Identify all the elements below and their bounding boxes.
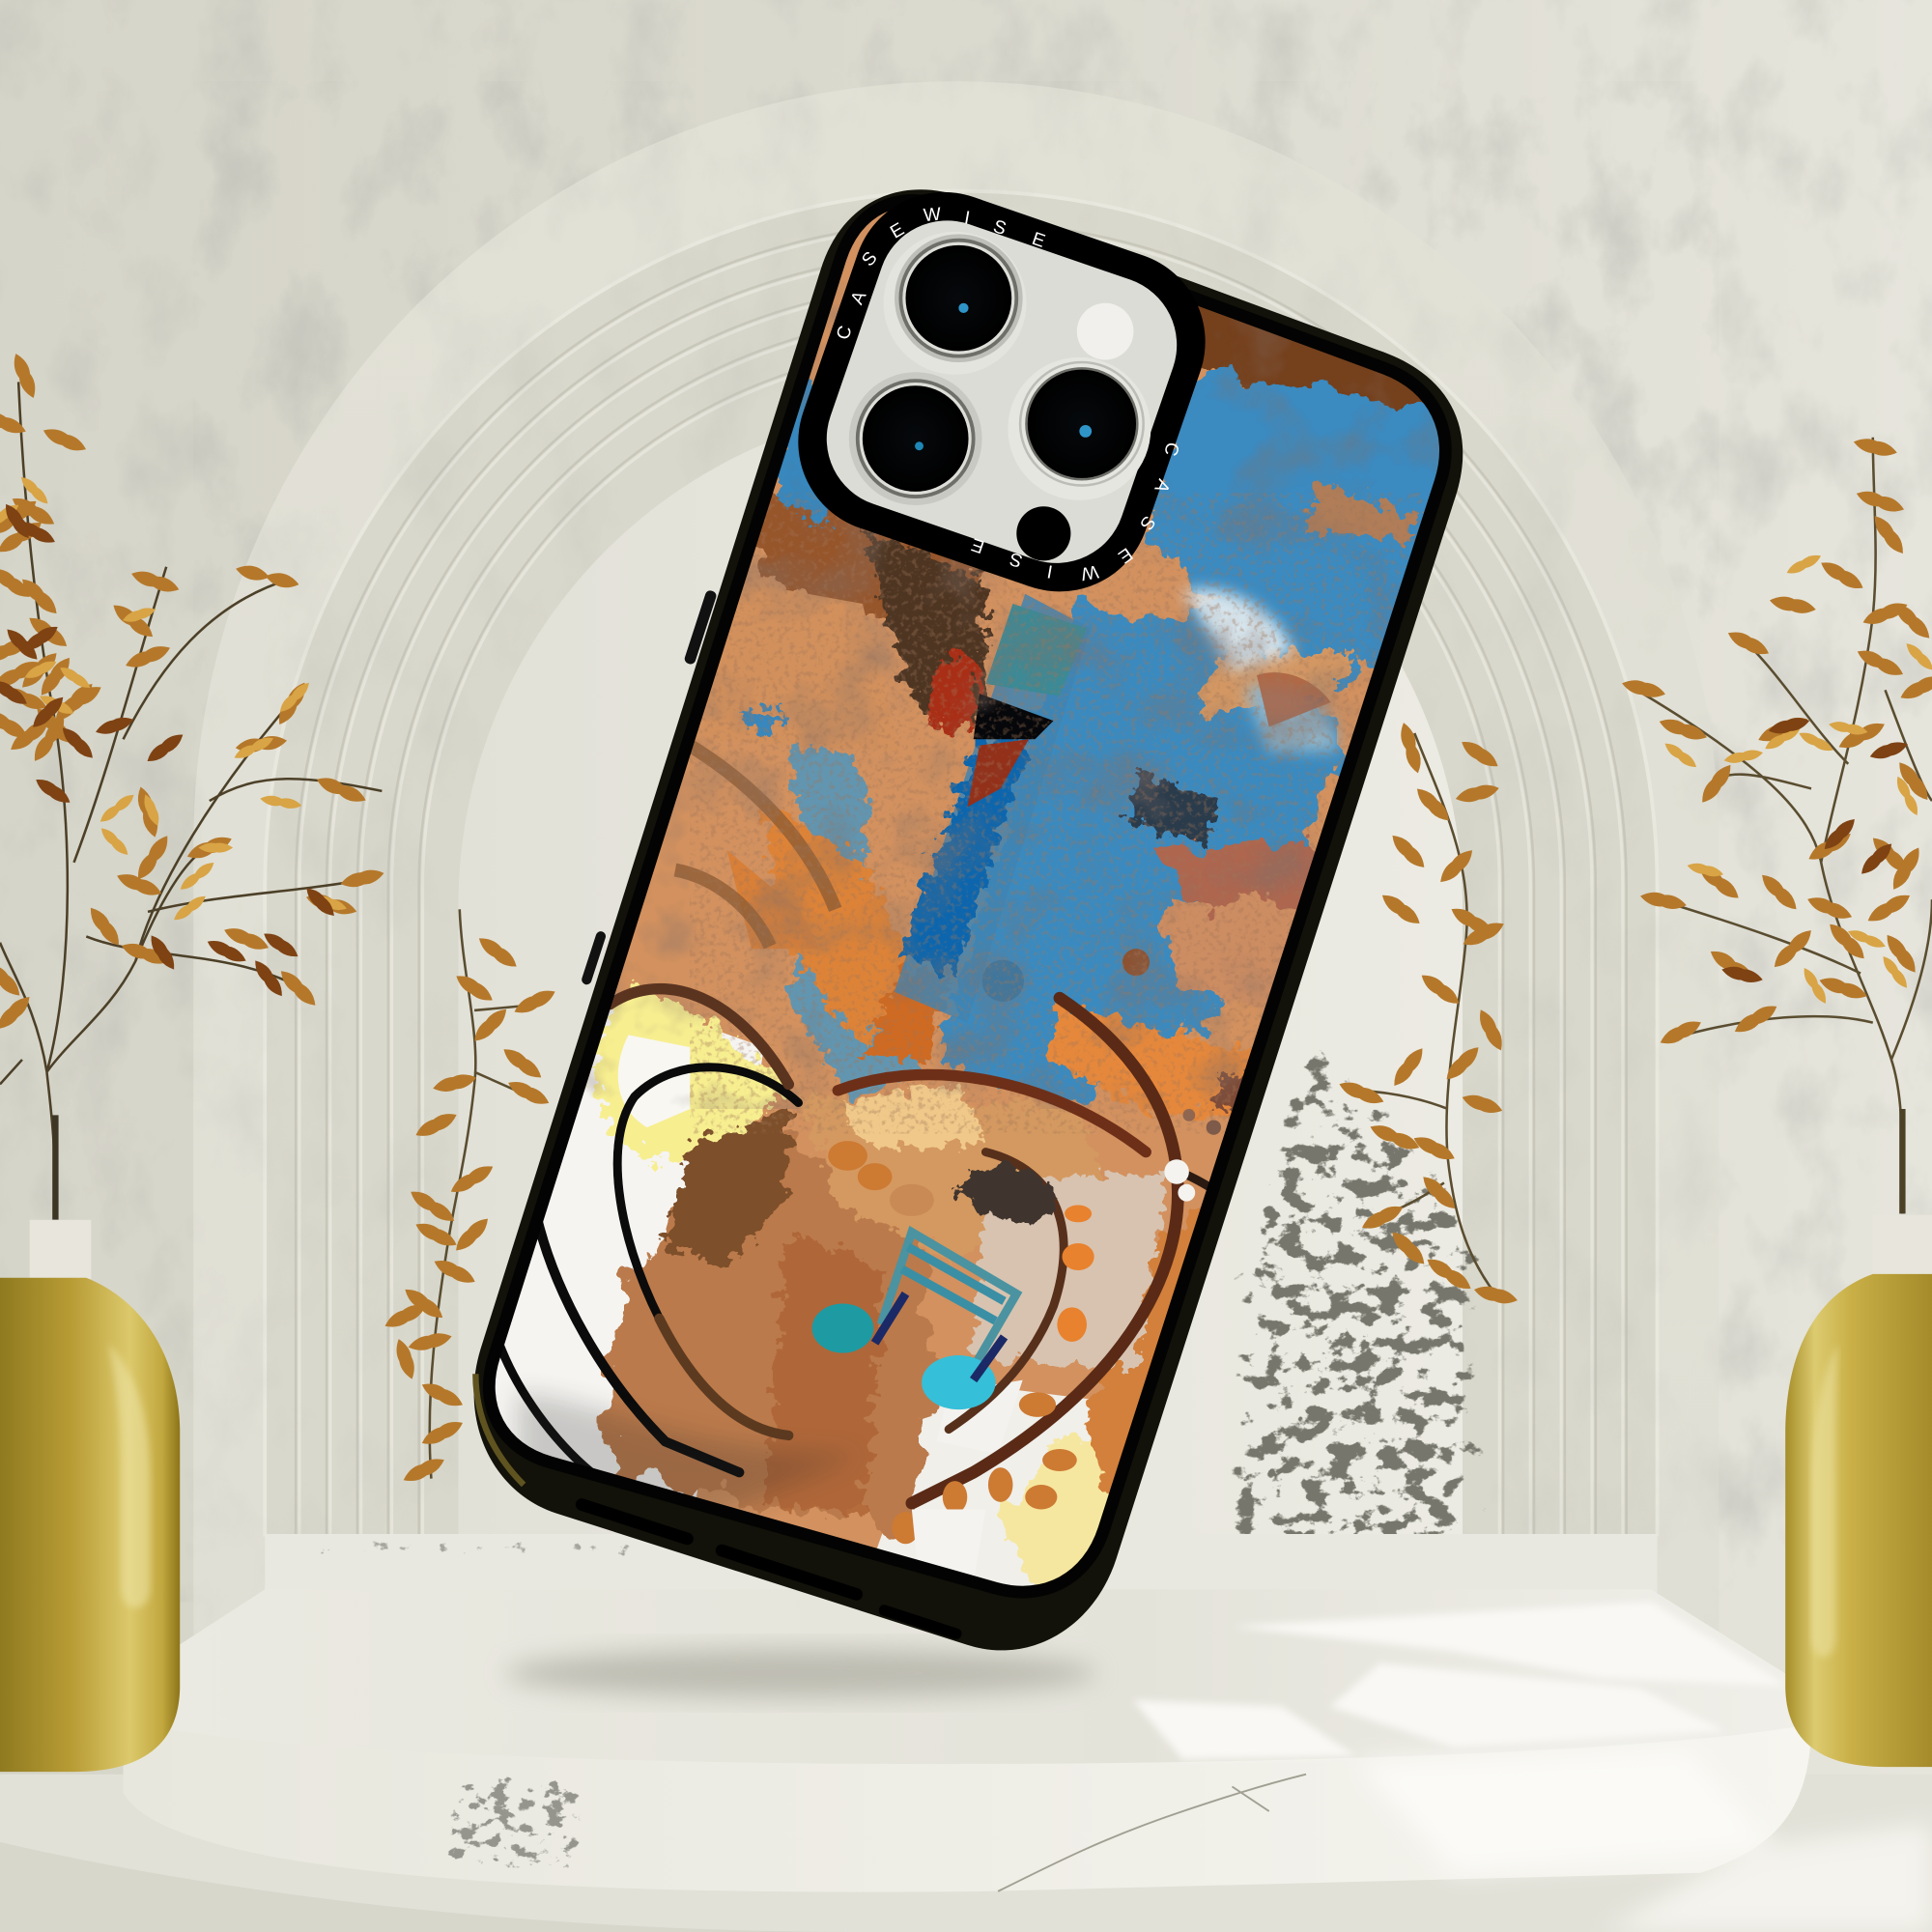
stage platform: [124, 1589, 1811, 1892]
lens: right: [1008, 357, 1151, 500]
CASEWISE ring text: S: [1008, 548, 1025, 571]
plant: right tree: [1633, 438, 1932, 1213]
flash: [1077, 303, 1133, 359]
artwork: music note: [812, 1233, 1016, 1409]
CASEWISE ring text: C: [833, 324, 857, 342]
glass reflection: [518, 1392, 863, 1528]
CASEWISE ring text: [833, 205, 1182, 583]
artwork: upper brown and rust: [702, 185, 1479, 752]
CASEWISE ring text: I: [1045, 560, 1054, 582]
camera island: [774, 167, 1230, 616]
printed artwork: [495, 211, 1439, 1586]
artwork: rust and grey smears: [675, 589, 1368, 1109]
arch niche: [193, 81, 1719, 1651]
black rim around artwork: [489, 200, 1445, 1592]
gold edge glint: [475, 1374, 524, 1485]
CASEWISE ring text: I: [963, 208, 972, 229]
CASEWISE ring text: W: [1079, 560, 1100, 583]
artwork: speckle texture: [585, 290, 1439, 1134]
camera plate: [808, 202, 1196, 582]
phone shadow on platform: [505, 1649, 1096, 1698]
vase: left: [0, 1220, 180, 1772]
sensor dot: [1016, 506, 1070, 560]
artwork: paint droplets: [828, 1109, 1247, 1544]
CASEWISE ring text: E: [969, 533, 987, 556]
plant: right vine behind phone: [1350, 733, 1501, 1296]
phone case body: [474, 189, 1463, 1650]
artwork: dark circle highlight: [955, 1165, 1060, 1223]
plant: left tree: [0, 370, 382, 1220]
artwork: white dots: [912, 1159, 1242, 1583]
CASEWISE ring text: A: [847, 288, 871, 308]
artwork: white lower-left field: [495, 980, 1109, 1586]
phone: [472, 189, 1463, 1650]
CASEWISE ring text: S: [990, 216, 1009, 240]
artwork: orange paint: [727, 480, 1417, 1122]
lens: bottom left: [849, 372, 982, 505]
phone buttons and ports: [574, 1496, 963, 1640]
vase: right: [1785, 1215, 1932, 1767]
lens: top: [884, 232, 1026, 375]
CASEWISE ring text: S: [1135, 512, 1159, 533]
CASEWISE ring text: S: [858, 248, 882, 270]
artwork: dark blue strip: [895, 594, 1150, 1023]
plant: left vine behind phone: [401, 909, 542, 1479]
artwork: blue paint: [739, 370, 1466, 1109]
lower floor: [0, 1775, 1932, 1932]
artwork: heart outlines: [499, 989, 1251, 1503]
CASEWISE ring text: C: [1159, 440, 1182, 458]
CASEWISE ring text: E: [1114, 543, 1136, 567]
CASEWISE ring text: A: [1150, 476, 1174, 496]
artwork: lower brown wash: [597, 1083, 1202, 1540]
CASEWISE ring text: W: [923, 205, 942, 226]
CASEWISE ring text: E: [887, 219, 908, 243]
CASEWISE ring text: E: [1030, 229, 1047, 252]
